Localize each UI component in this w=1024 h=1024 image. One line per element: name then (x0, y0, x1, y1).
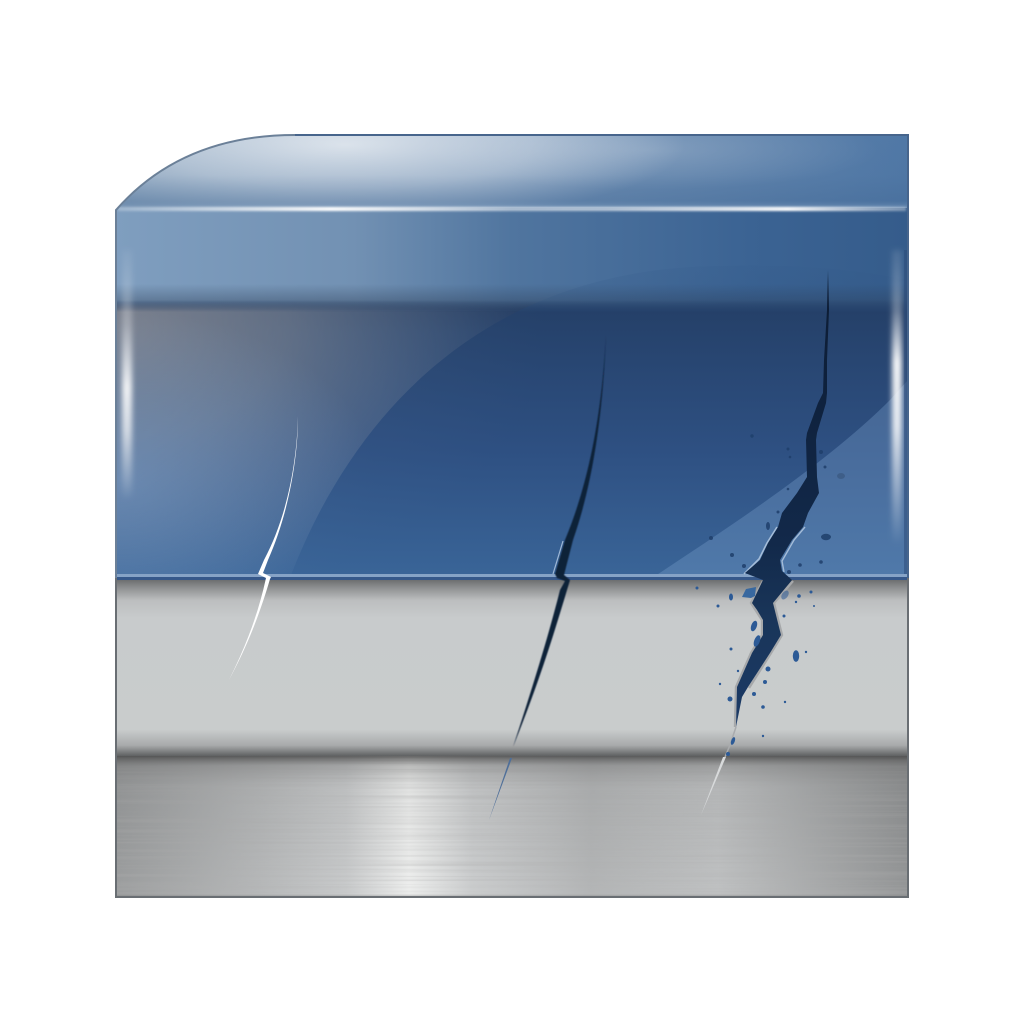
divider: blue and grey boundary (116, 574, 908, 580)
panel: blue coating layer (116, 208, 908, 578)
panel: brushed metal substrate (116, 756, 908, 897)
outline: panel border (116, 135, 908, 897)
crack: small white hairline (229, 416, 298, 680)
crack: large jagged (725, 270, 829, 757)
panel: grey middle layer (116, 579, 908, 756)
illustration: layered coating with three cracks (115, 134, 909, 898)
panel: top glossy blue bevel (116, 135, 908, 210)
highlight: bevel line (118, 207, 906, 211)
crack: medium dark (489, 335, 606, 820)
crack: large crack faint tail (701, 757, 726, 815)
debris particles (696, 434, 845, 756)
